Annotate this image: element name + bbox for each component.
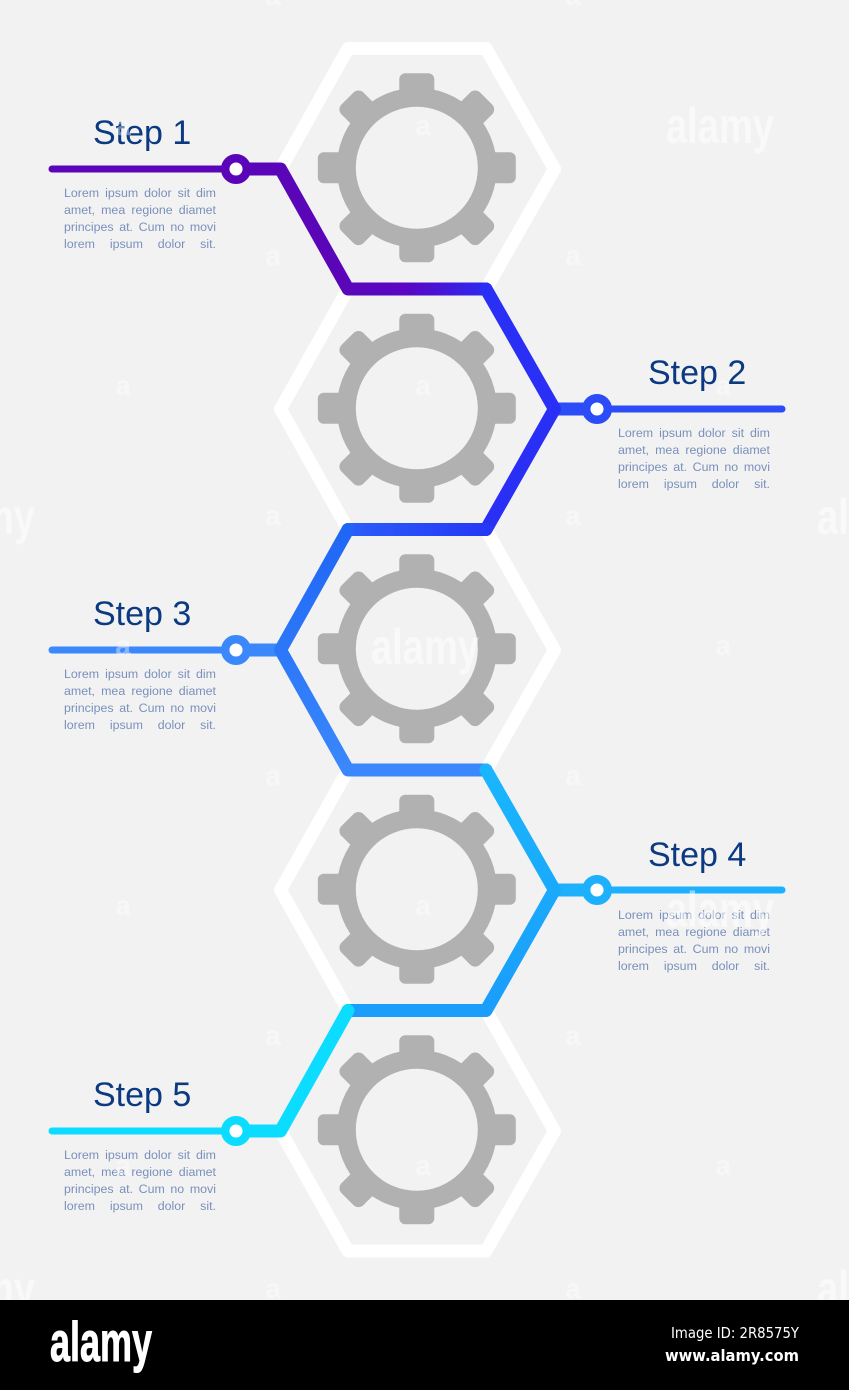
text block: step 3 description (64, 667, 216, 732)
watermarks: alamy (666, 98, 774, 154)
watermarks: alamy (371, 619, 479, 675)
text block: step 5 description: lorem ipsum dolor sit. (64, 1199, 216, 1213)
heading: Step 1: Step 1 (93, 114, 191, 152)
text block: step 2 description: amet, mea regione diamet (618, 443, 770, 457)
hexagon 1 (280, 48, 554, 289)
watermarks: a (115, 110, 131, 141)
watermarks: a (265, 1020, 281, 1051)
text block: step 4 description: principes at. Cum no movi (618, 942, 770, 956)
text block: step 3 description: amet, mea regione diamet (64, 684, 216, 698)
watermarks: a (265, 760, 281, 791)
text block: step 2 description (618, 426, 770, 491)
watermarks: a (415, 890, 431, 921)
text block: step 4 description (618, 908, 770, 973)
icon: gear 1 (318, 73, 516, 262)
watermarks: a (415, 1150, 431, 1181)
watermarks: a (415, 370, 431, 401)
text block: step 2 description: lorem ipsum dolor sit. (618, 477, 770, 491)
text block: step 3 description: Lorem ipsum dolor sit dim (64, 667, 216, 681)
icon: gear 4 (318, 795, 516, 984)
hexagon 4 (280, 770, 554, 1010)
watermarks: a (115, 1150, 131, 1181)
connector: step 5 (52, 1010, 348, 1142)
hexagon 3 (280, 530, 554, 770)
watermarks: a (565, 760, 581, 791)
text block: step 2 description: principes at. Cum no movi (618, 460, 770, 474)
watermarks: a (715, 1150, 731, 1181)
connector: step 3 (52, 530, 486, 770)
connector: step 1 (52, 158, 486, 289)
heading: Step 2: Step 2 (648, 354, 746, 392)
watermarks: a (415, 110, 431, 141)
text block: step 3 description: principes at. Cum no movi (64, 701, 216, 715)
hexagon 2 (280, 289, 554, 530)
text block: step 5 description: amet, mea regione diamet (64, 1165, 216, 1179)
text block: step 4 description: lorem ipsum dolor sit. (618, 959, 770, 973)
hexagon 5 (280, 1010, 554, 1251)
text block: step 4 description: Lorem ipsum dolor sit dim (618, 908, 770, 922)
footer image id: Image ID: 2R8575Y (671, 1324, 800, 1342)
connector: step 4 (348, 770, 782, 1010)
heading: Step 4: Step 4 (648, 836, 746, 874)
watermarks: a (565, 500, 581, 531)
text block: step 1 description (64, 186, 216, 251)
text block: step 1 description: Lorem ipsum dolor sit dim (64, 186, 216, 200)
connector: step 2 (348, 289, 782, 530)
watermarks: a (565, 1020, 581, 1051)
text block: step 2 description: Lorem ipsum dolor sit dim (618, 426, 770, 440)
watermarks: a (265, 500, 281, 531)
text block: step 5 description: principes at. Cum no movi (64, 1182, 216, 1196)
footer website: www.alamy.com (665, 1346, 799, 1365)
text block: step 5 description (64, 1148, 216, 1213)
icon: gear 3 (318, 554, 516, 743)
watermarks: a (715, 630, 731, 661)
icon: gear 5 (318, 1035, 516, 1224)
footer logo: alamy (50, 1310, 152, 1373)
watermarks: a (115, 370, 131, 401)
watermarks: a (265, 240, 281, 271)
text block: step 5 description: Lorem ipsum dolor sit dim (64, 1148, 216, 1162)
watermarks: a (115, 890, 131, 921)
watermarks: alamy (666, 882, 774, 938)
text block: step 1 description: amet, mea regione diamet (64, 203, 216, 217)
text block: step 1 description: lorem ipsum dolor sit. (64, 237, 216, 251)
watermarks: a (565, 240, 581, 271)
footer bar (0, 1300, 849, 1390)
heading: Step 5: Step 5 (93, 1076, 191, 1114)
text block: step 4 description: amet, mea regione diamet (618, 925, 770, 939)
text block: step 3 description: lorem ipsum dolor sit. (64, 718, 216, 732)
watermarks: a (715, 370, 731, 401)
heading: Step 3: Step 3 (93, 595, 191, 633)
text block: step 1 description: principes at. Cum no movi (64, 220, 216, 234)
watermarks: a (565, 1273, 581, 1304)
icon: gear 2 (318, 314, 516, 503)
watermarks: a (115, 630, 131, 661)
watermarks: a (265, 1273, 281, 1304)
